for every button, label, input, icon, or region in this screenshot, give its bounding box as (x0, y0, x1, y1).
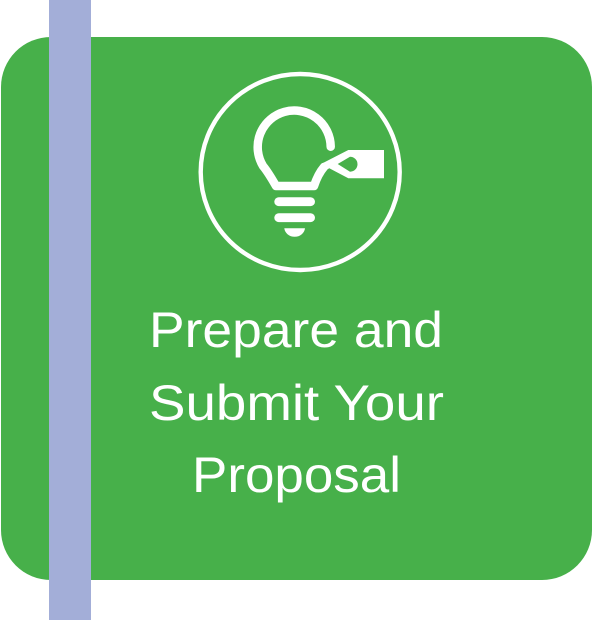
heading text: Proposal (192, 447, 401, 503)
bulb outline (258, 111, 331, 186)
heading text (149, 302, 444, 503)
heading text: Submit Your (149, 375, 444, 431)
vertical lavender bar (49, 0, 91, 620)
heading text: Prepare and (149, 302, 443, 358)
price tag (321, 150, 384, 178)
bulb tip (284, 228, 305, 237)
icon: light bulb with price tag in circle (201, 74, 400, 270)
icon ring (201, 74, 400, 270)
bulb base stripes (274, 197, 315, 206)
